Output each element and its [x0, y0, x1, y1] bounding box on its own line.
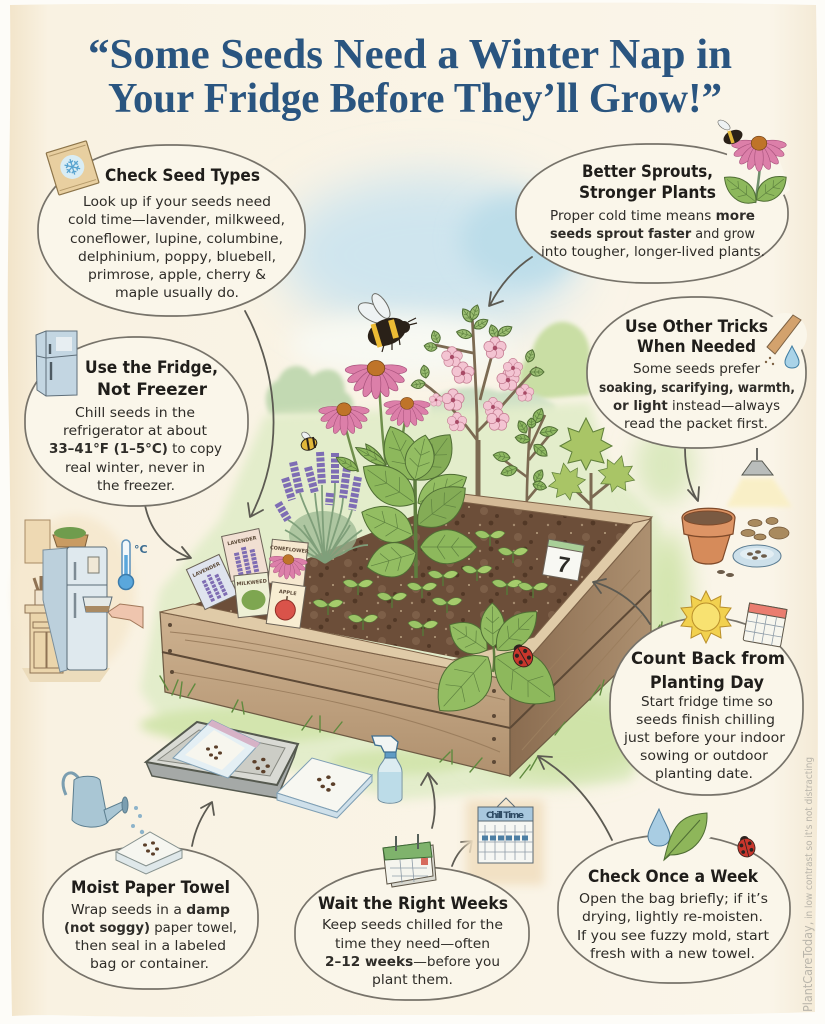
kitchen scene [15, 515, 143, 682]
bubble: check seed types: delphinium, poppy, bluebell, [78, 250, 276, 265]
cherry tree [410, 303, 544, 517]
tray, bag and towels [146, 720, 372, 818]
arrow: check weekly to bed [538, 756, 612, 840]
bubble: check once a week: Open the bag briefly; if it’s [579, 892, 768, 907]
bubble: count back from planting day: just before your indoor [623, 731, 786, 746]
bubble: check seed types: Check Seed Types [105, 166, 260, 185]
arrow: wait weeks to bed [421, 773, 437, 828]
icon: seed packet with snowflake [46, 141, 99, 195]
watermark credit: PlantCareToday, in low contrast so it's not distracting [801, 757, 815, 1012]
icon: refrigerator [36, 331, 77, 396]
icons: water drop, leaf and ladybug [648, 809, 757, 860]
bubble: count back from planting day: Count Back from [631, 649, 785, 668]
bubble: moist paper towel: bag or container. [90, 957, 209, 972]
bubble: use other tricks [587, 297, 807, 448]
title: Your Fridge Before They’ll Grow!” [108, 76, 722, 122]
bubble: use the fridge: Use the Fridge, [85, 358, 218, 377]
bubble: wait the right weeks: plant them. [372, 973, 453, 988]
bubble: count back from planting day: Start fridge time so [641, 695, 773, 710]
milkweed plant [353, 420, 477, 584]
bubble: count back from planting day: seeds finish chilling [636, 713, 775, 728]
seed packets [186, 529, 310, 628]
arrow: paper towel to tray [192, 802, 214, 846]
seed packets: CONEFLOWER [270, 545, 309, 555]
bubble: use other tricks: read the packet first. [624, 417, 768, 432]
bubble: check once a week: If you see fuzzy mold, start [577, 929, 769, 944]
bubble: moist paper towel: Wrap seeds in a damp [71, 903, 230, 918]
grass tufts around bed [160, 622, 662, 778]
icon: coneflower and bee [716, 118, 792, 210]
garden backdrop: sky, trees and lawn [140, 175, 695, 800]
bubble: use other tricks: When Needed [637, 337, 756, 356]
day seven calendar in bed: 7 [555, 551, 572, 578]
arrow: wait weeks to wall calendar [452, 841, 472, 866]
bubble: check seed types: maple usually do. [115, 286, 239, 301]
lavender plant [278, 452, 368, 563]
bubble: wait the right weeks: Keep seeds chilled for the [322, 918, 503, 933]
arrow: fridge to packets [145, 505, 191, 560]
bubble: wait the right weeks: Wait the Right Weeks [318, 894, 508, 913]
bubble: moist paper towel: then seal in a labeled [75, 939, 226, 954]
bubble: check seed types: coneflower, lupine, columbine, [70, 232, 283, 247]
day seven calendar in bed [542, 539, 584, 581]
bubble: check once a week: Check Once a Week [588, 867, 759, 886]
title: “Some Seeds Need a Winter Nap in [88, 32, 732, 78]
bubble: moist paper towel: Moist Paper Towel [71, 878, 230, 897]
bubble: check seed types: cold time—lavender, milkweed, [68, 213, 285, 228]
bubble: moist paper towel: (not soggy) paper towel, [64, 921, 237, 936]
large bumblebee [355, 291, 417, 352]
bubble: check seed types: primrose, apple, cherry & [88, 268, 266, 283]
bubble: check seed types: Look up if your seeds need [83, 195, 271, 210]
bubble: use the fridge: Chill seeds in the [75, 406, 195, 421]
bubble: count back from planting day: sowing or outdoor [640, 749, 769, 764]
bubble: check once a week [558, 835, 790, 983]
bubble: count back from planting day [610, 618, 803, 795]
arrow: other tricks to pot [685, 448, 699, 501]
bubble: use the fridge [25, 337, 248, 506]
bubble: moist paper towel [43, 832, 258, 989]
arrow: check seed types to packets [245, 311, 274, 517]
bubble: check once a week: fresh with a new towel. [590, 947, 755, 962]
bubble: use the fridge: real winter, never in [65, 461, 205, 476]
bubble: better sprouts: Stronger Plants [579, 183, 716, 202]
bubble: count back from planting day: planting date. [655, 767, 753, 782]
bubble: better sprouts: Proper cold time means more [550, 209, 755, 224]
maple sapling [545, 418, 640, 537]
bubble: wait the right weeks [295, 867, 529, 1000]
seed packets: LAVENDER [192, 561, 221, 579]
seed packets: MILKWEED [236, 578, 267, 588]
bubble: use the fridge: 33–41°F (1–5°C) to copy [49, 442, 222, 457]
small bee [299, 430, 319, 452]
bubble: better sprouts: into tougher, longer-lived plants. [541, 245, 765, 260]
bubble: check once a week: drying, lightly re-moisten. [582, 910, 763, 925]
icon: seed packet with snowflake: ❄ [60, 154, 85, 183]
icons: sun and planting calendar [681, 591, 787, 647]
wall calendar chill time: Chill Time [486, 811, 524, 821]
bubble: wait the right weeks: 2–12 weeks —before you [325, 955, 500, 970]
bubble: use the fridge: refrigerator at about [63, 424, 207, 439]
arrow: better sprouts to tree [489, 257, 532, 306]
wall calendar chill time [466, 798, 544, 885]
bubble: better sprouts [516, 144, 788, 283]
bubble: wait the right weeks: time they need—often [335, 937, 490, 952]
watering can icon [63, 773, 144, 834]
seed packets: LAVENDER [227, 535, 257, 547]
icon: thermometer: °C [134, 543, 148, 556]
bubble: use the fridge: Not Freezer [97, 380, 208, 399]
seedlings in soil [313, 531, 548, 636]
icon: scarifying file and water drop [765, 315, 801, 368]
bubble: check seed types [38, 145, 305, 316]
title [88, 32, 732, 122]
icon: thermometer [118, 540, 148, 590]
seed packets: APPLE [278, 589, 297, 597]
lamp, pot, seeds and bowl [682, 448, 792, 577]
bubble: use other tricks: or light instead—always [613, 399, 780, 414]
bubble: use other tricks: Use Other Tricks [625, 317, 768, 336]
arrow: count back to bed [593, 579, 650, 624]
bubble: better sprouts: seeds sprout faster and grow [550, 227, 755, 242]
bubble: better sprouts: Better Sprouts, [582, 162, 713, 181]
spray bottle [372, 736, 402, 803]
bubble: count back from planting day: Planting Day [650, 673, 764, 692]
bubble: use the fridge: the freezer. [97, 479, 175, 494]
front corner plant with ladybug [423, 601, 569, 727]
desk calendar icon [383, 834, 436, 887]
bubble: use other tricks: Some seeds prefer [633, 362, 761, 377]
young tree [492, 406, 559, 530]
coneflowers [319, 360, 430, 474]
bubble: use other tricks: soaking, scarifying, warmth, [599, 381, 795, 396]
raised wooden bed [160, 494, 652, 776]
